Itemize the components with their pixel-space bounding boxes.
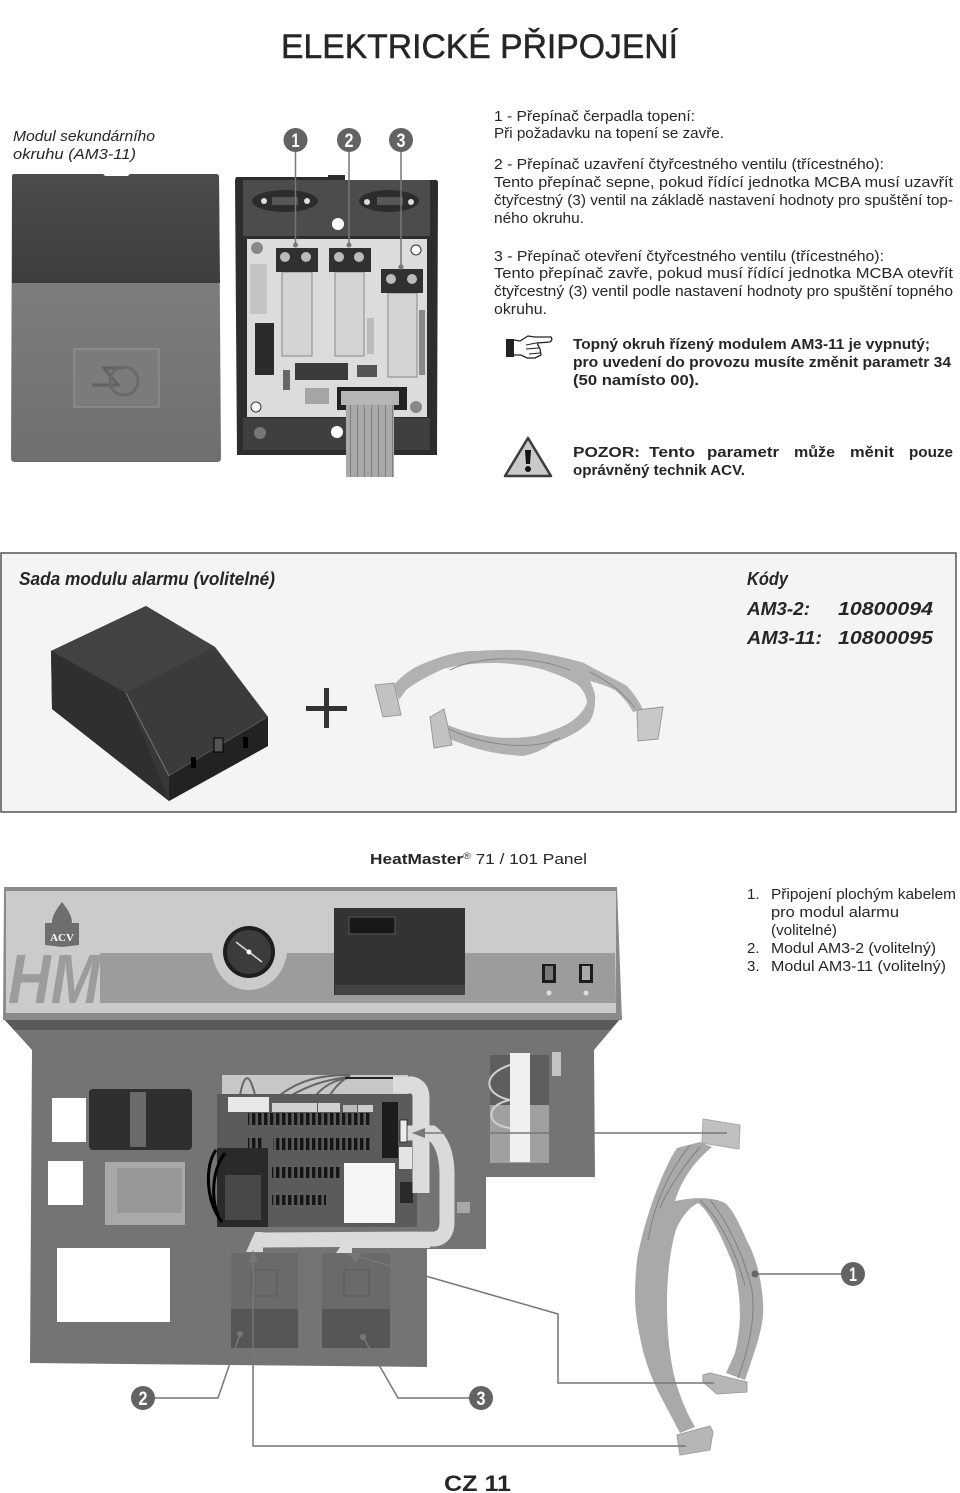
callout 3 [389,128,413,270]
legend list: 3. [747,958,760,975]
text block: switch 2: 2 - Přepínač uzavření čtyřcestného ventilu (třícestného): [494,156,884,173]
switches [542,964,593,996]
codes: AM3-2: [746,599,810,619]
legend list: Modul AM3-2 (volitelný) [771,940,936,957]
photo: open module with circuit board [235,175,438,477]
codes [746,569,934,648]
callout 1: 1 [292,131,300,152]
white cut-outs [52,1098,86,1142]
pressure gauge [223,926,275,978]
callout 3: 3 [476,1389,486,1410]
plus sign [306,688,347,728]
heading: panel name: ® [463,851,471,861]
codes: 10800095 [838,628,934,648]
alarm module 2 [231,1253,298,1348]
callout 3 [360,1334,493,1410]
callout 2 [131,1331,243,1410]
caption: secondary circuit module: Modul sekundárního [13,128,155,145]
callout 2: 2 [138,1389,148,1410]
note: heating circuit: pro uvedení do provozu musíte změnit parametr 34 [573,355,951,371]
text block: switch 1: 1 - Přepínač čerpadla topení: [494,108,695,125]
circuit board [247,239,427,417]
legend list: Modul AM3-11 (volitelný) [771,958,946,975]
front fascia [3,887,622,1020]
photo: ribbon cable [375,650,663,756]
codes: AM3-11: [746,628,822,648]
connector to module 3 [703,1373,747,1394]
control board [208,1075,417,1227]
warning text: měnit [850,445,894,461]
callout 1 [284,128,308,248]
text block: switch 2: Tento přepínač sepne, pokud řídící jednotka MCBA musí uzavřít [494,174,954,191]
callout 1 [752,1262,865,1286]
text block: switch 2 [494,156,954,227]
codes: Kódy [747,569,789,589]
relay block [89,1089,192,1150]
text block: switch 3 [494,248,954,318]
text block: switch 1: Při požadavku na topení se zavře. [494,125,724,142]
photo: alarm module [51,606,268,801]
embossed logo [74,349,159,407]
callout 2: 2 [344,131,354,152]
icon: warning triangle [505,438,551,476]
callout 1: 1 [849,1265,857,1286]
ACV logo: ACV [50,932,74,944]
title: ELEKTRICKÉ PŘIPOJENÍ [281,28,679,66]
warning text: oprávněný technik ACV. [573,463,745,479]
callout 3: 3 [396,131,406,152]
photo: boiler control panel [3,887,622,1367]
text block: switch 3: 3 - Přepínač otevření čtyřcestného ventilu (třícestného): [494,248,884,265]
legend list: Připojení plochým kabelem [771,886,956,903]
arrow: ribbon to board [412,1128,727,1138]
text block: switch 2: čtyřcestný (3) ventil na základě nastavení hodnoty pro spuštění top- [494,192,953,209]
warning text: Tento [649,445,695,461]
internal flat ribbon [246,1085,470,1253]
panel heading: Sada modulu alarmu (volitelné) [19,569,275,589]
heading: panel name: HeatMaster [370,851,463,868]
panel: alarm module kit [1,553,956,812]
caption: secondary circuit module: okruhu (AM3-11) [13,146,136,163]
ribbon cable loop [635,1119,763,1455]
note: heating circuit [573,337,951,389]
text block: switch 2: ného okruhu. [494,210,584,227]
text block: switch 3: čtyřcestný (3) ventil podle nastavení hodnoty pro spuštění topného [494,283,953,300]
icon: pointing hand [506,336,552,358]
text block: switch 3: Tento přepínač zavře, pokud musí řídící jednotka MCBA otevřít [494,265,954,282]
legend list: (volitelné) [771,922,837,939]
display cover [334,908,465,995]
top connector [702,1119,740,1149]
warning text: pouze [909,445,953,461]
back plate [3,1018,621,1367]
warning text: parametr [707,445,779,461]
text block: switch 3: okruhu. [494,301,547,318]
legend list: 1. [747,886,760,903]
warning text [573,445,953,479]
alarm module 3 [322,1253,390,1348]
arrow: ribbon to module 3 [347,1253,714,1383]
text block: switch 1 [494,108,724,142]
HM logotype: HM [8,940,101,1018]
connector to module 2 [677,1426,713,1455]
codes: 10800094 [838,599,933,619]
ribbon cable [346,405,394,477]
caption: secondary circuit module [13,128,155,163]
heading: panel name: 71 / 101 Panel [471,851,587,868]
legend list: pro modul alarmu [771,904,899,921]
legend list [747,886,956,975]
callout 2 [337,128,361,248]
photo: module cover [11,174,221,462]
warning text: může [794,445,835,461]
arrow: ribbon to module 2 [248,1250,686,1446]
warning text: POZOR: [573,445,640,461]
transformer [105,1162,185,1225]
legend list: 2. [747,940,760,957]
terminal strip [489,1052,561,1163]
note: heating circuit: Topný okruh řízený modulem AM3-11 je vypnutý; [573,337,930,353]
note: heating circuit: (50 namísto 00). [573,373,699,389]
ACV logo [45,902,79,947]
